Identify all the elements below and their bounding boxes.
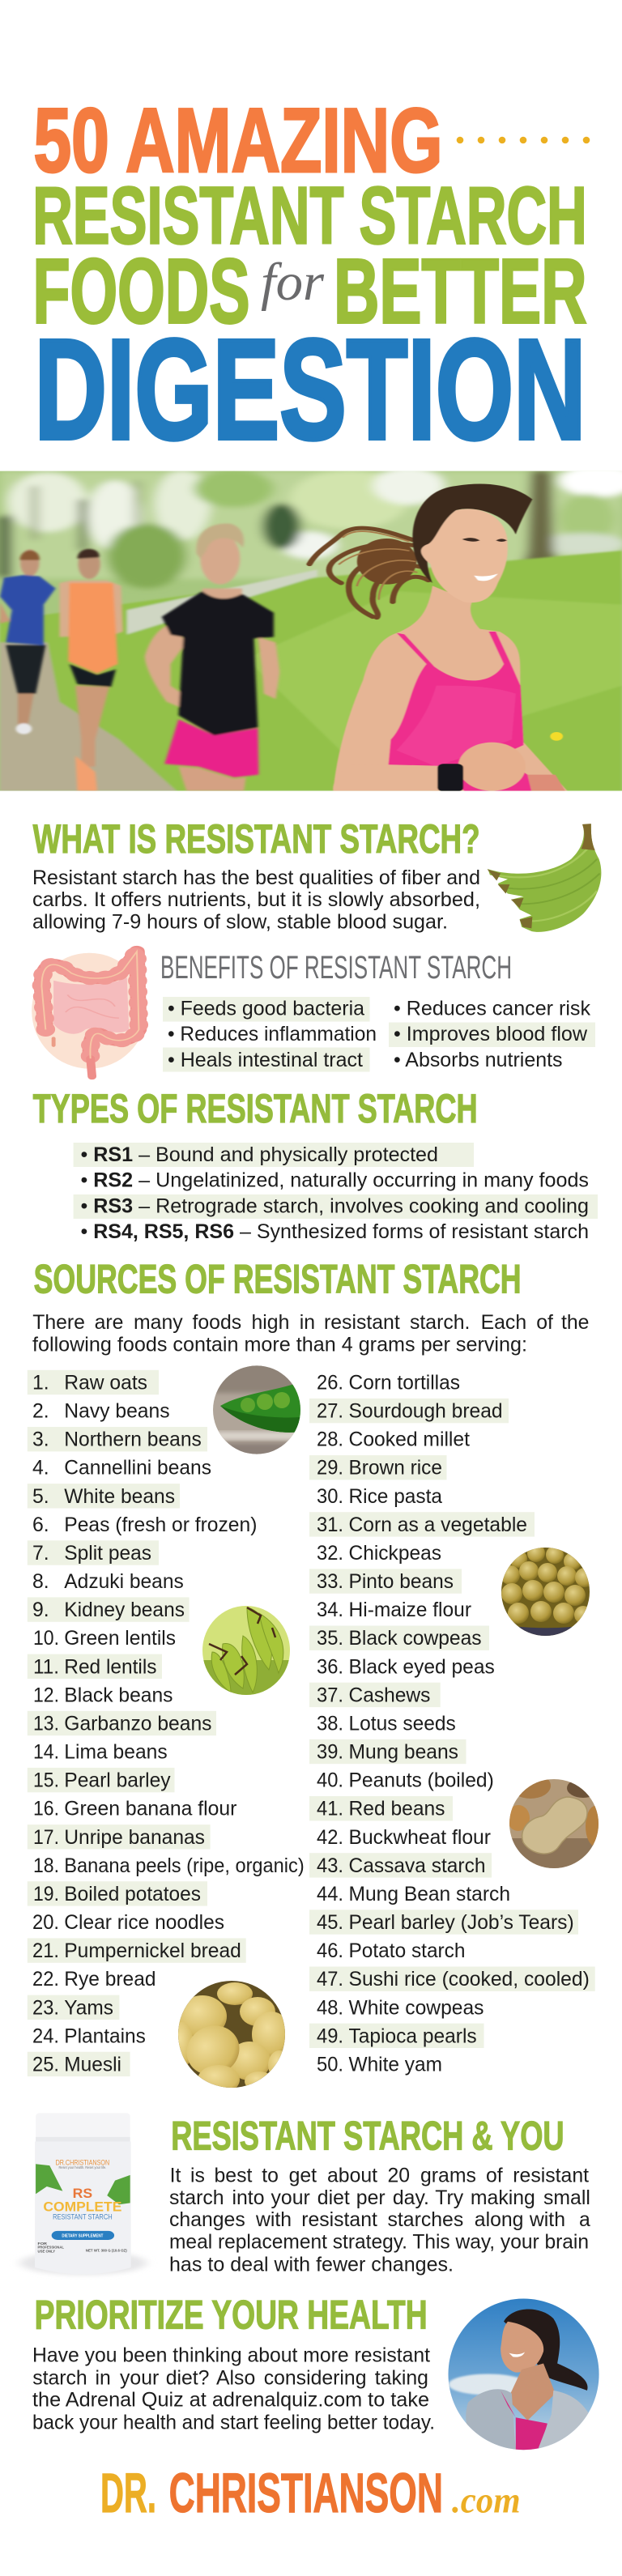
list column: foods 26 to 50: Rice pasta <box>348 1486 442 1508</box>
product: RS Complete bottle: COMPLETE <box>43 2199 121 2215</box>
runner in orange <box>59 549 123 791</box>
list column: foods 1 to 25: 13. <box>33 1714 59 1735</box>
runner in pink: foreground <box>309 483 567 791</box>
list column: foods 1 to 25: Lima beans <box>64 1741 168 1764</box>
list column: foods 1 to 25: 2. <box>32 1401 49 1423</box>
list column: foods 26 to 50: Corn as a vegetable <box>348 1514 527 1536</box>
list column: foods 26 to 50: Cooked millet <box>348 1429 470 1451</box>
product: RS Complete bottle: PROFESSIONAL <box>38 2246 64 2250</box>
text block: what is resistant starch: carbs. It offers nutrients, but it is slowly absorbed, <box>32 889 480 911</box>
list column: foods 26 to 50: Corn tortillas <box>348 1372 460 1394</box>
list column: foods 1 to 25: Boiled potatoes <box>64 1884 201 1905</box>
text block: resistant starch and you: into <box>232 2187 264 2209</box>
text block: sources intro: resistant <box>324 1312 400 1334</box>
text block: what is resistant starch: allowing 7-9 hours of slow, stable blood sugar. <box>32 911 448 933</box>
list column: foods 1 to 25: 25. <box>32 2054 59 2076</box>
text block: resistant starch and you: starch <box>169 2187 224 2209</box>
list column: foods 26 to 50: 49. <box>317 2025 343 2047</box>
runner in black <box>145 523 279 791</box>
list column: foods 26 to 50: Brown rice <box>348 1458 442 1480</box>
text block: prioritize your health: considering <box>264 2367 367 2389</box>
list column: foods 26 to 50: Pearl barley (Job’s Tears) <box>348 1912 574 1934</box>
list column: foods 1 to 25: 24. <box>32 2025 59 2047</box>
icon: intestines <box>32 952 147 1076</box>
title word: for: for <box>261 253 324 312</box>
text block: prioritize your health: back your health and start feeling better today. <box>32 2412 435 2433</box>
list column: foods 26 to 50: 39. <box>317 1741 343 1764</box>
text block: resistant starch and you: day. <box>393 2187 429 2209</box>
list column: foods 26 to 50: Mung Bean starch <box>348 1884 510 1905</box>
list column: foods 1 to 25: 23. <box>32 1997 59 2019</box>
list column: foods 26 to 50: 42. <box>317 1827 343 1849</box>
list column: foods 26 to 50: Pinto beans <box>348 1571 454 1593</box>
panel: benefits list: • Feeds good bacteria <box>168 998 364 1020</box>
text block: sources intro <box>32 1312 589 1356</box>
list column: foods 26 to 50: 43. <box>317 1855 343 1877</box>
text block: prioritize your health: in <box>96 2367 111 2389</box>
list column: foods 1 to 25: Yams <box>64 1997 113 2019</box>
list column: foods 26 to 50: 47. <box>317 1969 343 1991</box>
list column: foods 26 to 50: 48. <box>317 1997 343 2019</box>
text block: sources intro: Each <box>481 1312 526 1334</box>
list column: foods 26 to 50: Lotus seeds <box>348 1714 456 1735</box>
photo: pea pod <box>213 1365 300 1454</box>
list column: foods 26 to 50: Red beans <box>348 1799 445 1820</box>
list column: foods 26 to 50: 44. <box>317 1884 343 1905</box>
list column: foods 1 to 25: 5. <box>32 1486 49 1508</box>
text block: sources intro: foods <box>193 1312 241 1334</box>
list column: foods 26 to 50: Tapioca pearls <box>348 2025 477 2047</box>
photo: green bananas <box>202 1606 290 1695</box>
panel: types list: • RS1 – Bound and physically protected <box>81 1144 438 1166</box>
product: RS Complete bottle: DIETARY SUPPLEMENT <box>62 2234 104 2238</box>
text block: resistant starch and you: with <box>255 2209 292 2231</box>
text block: what is resistant starch <box>32 867 480 933</box>
list column: foods 1 to 25: 15. <box>33 1770 59 1792</box>
list column: foods 26 to 50: 26. <box>317 1372 343 1394</box>
text block: resistant starch and you: meal replacement strategy. This way, your brain <box>169 2232 589 2254</box>
list column: foods 1 to 25: Black beans <box>64 1684 173 1706</box>
text block: sources intro: are <box>95 1312 123 1334</box>
list column: foods 26 to 50: White cowpeas <box>348 1997 484 2019</box>
product: RS Complete bottle: NET WT. 300 G (10.6 OZ) <box>86 2249 127 2253</box>
list column: foods 26 to 50: 27. <box>317 1401 343 1423</box>
list column: foods 26 to 50: White yam <box>348 2054 442 2076</box>
list column: foods 1 to 25: 1. <box>32 1372 49 1394</box>
list column: foods 1 to 25: 16. <box>33 1799 59 1820</box>
text block: prioritize your health: Also <box>216 2367 255 2389</box>
text block: resistant starch and you: making <box>471 2187 535 2209</box>
text block: resistant starch and you: get <box>289 2165 317 2186</box>
text block: sources intro: many <box>134 1312 183 1334</box>
list column: foods 1 to 25: Raw oats <box>64 1372 147 1394</box>
text block: resistant starch and you: It <box>170 2165 181 2186</box>
list column: foods 1 to 25: Rye bread <box>64 1969 156 1991</box>
panel: types list: • RS3 – Retrograde starch, involves cooking and cooling <box>81 1195 589 1218</box>
list column: foods 26 to 50: Sourdough bread <box>348 1401 503 1423</box>
list column: foods 1 to 25: Peas (fresh or frozen) <box>64 1514 257 1536</box>
photo: peanuts <box>509 1779 599 1868</box>
photo: smiling woman in hoodie <box>446 2297 601 2450</box>
list column: foods 1 to 25: 10. <box>33 1628 59 1650</box>
list column: foods 1 to 25 <box>28 1370 305 2076</box>
panel: types list <box>74 1143 598 1243</box>
text block: sources intro: There <box>32 1312 85 1334</box>
list column: foods 26 to 50: Potato starch <box>348 1940 465 1962</box>
panel: benefits list: • Reduces cancer risk <box>394 998 591 1020</box>
list column: foods 26 to 50: Sushi rice (cooked, cooled) <box>348 1969 590 1991</box>
list column: foods 26 to 50: 50. <box>317 2054 343 2076</box>
text block: resistant starch and you: diet <box>317 2187 350 2209</box>
list column: foods 26 to 50: 31. <box>317 1514 343 1536</box>
list column: foods 1 to 25: Kidney beans <box>64 1599 185 1621</box>
panel: types list: • RS2 – Ungelatinized, naturally occurring in many foods <box>81 1170 589 1192</box>
list column: foods 26 to 50 <box>309 1372 595 2076</box>
text block: resistant starch and you: about <box>327 2165 377 2186</box>
panel: types list: • RS4, RS5, RS6 – Synthesized forms of resistant starch <box>81 1221 589 1243</box>
logo: Dr. Christianson: DR. <box>100 2462 156 2524</box>
title line: 50 Amazing: 50 AMAZING <box>34 90 442 191</box>
panel: benefits list: • Reduces inflammation <box>168 1024 377 1045</box>
heading: prioritize your health: PRIORITIZE YOUR HEALTH <box>35 2292 428 2337</box>
icon: green bananas <box>487 824 601 932</box>
list column: foods 1 to 25: Clear rice noodles <box>64 1912 224 1934</box>
text block: sources intro: high <box>251 1312 289 1334</box>
text block: resistant starch and you: resistant <box>513 2165 589 2186</box>
list column: foods 1 to 25: 3. <box>32 1429 49 1451</box>
list column: foods 1 to 25: Navy beans <box>64 1401 170 1423</box>
panel: benefits list: • Absorbs nutrients <box>394 1050 562 1071</box>
list column: foods 26 to 50: Peanuts (boiled) <box>348 1770 494 1792</box>
list column: foods 26 to 50: 29. <box>317 1458 343 1480</box>
list column: foods 26 to 50: Cashews <box>348 1684 430 1706</box>
list column: foods 1 to 25: 14. <box>33 1741 59 1764</box>
list column: foods 1 to 25: 9. <box>32 1599 49 1621</box>
list column: foods 1 to 25: 18. <box>33 1855 59 1877</box>
list column: foods 26 to 50: 30. <box>317 1486 343 1508</box>
list column: foods 1 to 25: Northern beans <box>64 1429 202 1451</box>
text block: resistant starch and you: your <box>271 2187 310 2209</box>
text block: resistant starch and you: grams <box>420 2165 476 2186</box>
list column: foods 26 to 50: 34. <box>317 1599 343 1621</box>
text block: prioritize your health: your <box>120 2367 159 2389</box>
list column: foods 26 to 50: 36. <box>317 1656 343 1678</box>
list column: foods 1 to 25: Pumpernickel bread <box>64 1940 241 1962</box>
list column: foods 1 to 25: 4. <box>32 1458 49 1480</box>
text block: resistant starch and you: per <box>356 2187 386 2209</box>
list column: foods 1 to 25: White beans <box>64 1486 175 1508</box>
text block: resistant starch and you: best <box>214 2165 252 2186</box>
panel: benefits list: • Heals intestinal tract <box>168 1050 363 1071</box>
text block: resistant starch and you: 20 <box>387 2165 410 2186</box>
list column: foods 26 to 50: 45. <box>317 1912 343 1934</box>
text block: resistant starch and you <box>169 2165 590 2276</box>
text block: prioritize your health: the Adrenal Quiz at adrenalquiz.com to take <box>32 2389 429 2412</box>
list column: foods 26 to 50: 40. <box>317 1770 343 1792</box>
list column: foods 26 to 50: Hi-maize flour <box>348 1599 471 1621</box>
list column: foods 1 to 25: 8. <box>32 1571 49 1593</box>
list column: foods 1 to 25: Cannellini beans <box>64 1458 211 1480</box>
list column: foods 1 to 25: Unripe bananas <box>64 1827 205 1849</box>
list column: foods 26 to 50: Black eyed peas <box>348 1656 495 1678</box>
text block: sources intro: following foods contain more than 4 grams per serving: <box>32 1335 527 1356</box>
panel: benefits list: • Improves blood flow <box>394 1024 587 1045</box>
text block: resistant starch and you: Try <box>435 2187 464 2209</box>
list column: foods 1 to 25: Red lentils <box>64 1656 157 1678</box>
list column: foods 26 to 50: 28. <box>317 1429 343 1451</box>
text block: resistant starch and you: starches <box>387 2209 463 2231</box>
list column: foods 26 to 50: 35. <box>317 1628 343 1650</box>
product: RS Complete bottle: DR.CHRISTIANSON <box>56 2159 109 2167</box>
product: RS Complete bottle: Reset your health. Reset your life. <box>58 2165 106 2169</box>
list column: foods 1 to 25: 22. <box>32 1969 59 1991</box>
list column: foods 1 to 25: 17. <box>33 1827 59 1849</box>
title word: Foods: FOODS <box>32 240 249 342</box>
text block: resistant starch and you: changes <box>169 2209 245 2231</box>
hero photo: women running <box>0 464 622 791</box>
list column: foods 1 to 25: 19. <box>33 1884 59 1905</box>
photo: potatoes <box>178 1981 285 2088</box>
list column: foods 1 to 25: Banana peels (ripe, organic) <box>64 1855 305 1877</box>
list column: foods 1 to 25: Garbanzo beans <box>64 1714 212 1735</box>
list column: foods 1 to 25: Plantains <box>64 2025 146 2047</box>
list column: foods 26 to 50: Cassava starch <box>348 1855 486 1877</box>
text block: prioritize your health: diet? <box>166 2367 209 2389</box>
text block: resistant starch and you: has to deal with fewer changes. <box>169 2255 454 2276</box>
list column: foods 26 to 50: 33. <box>317 1571 343 1593</box>
text block: sources intro: in <box>300 1312 315 1334</box>
product: RS Complete bottle: RESISTANT STARCH <box>53 2214 113 2221</box>
text block: resistant starch and you: resistant <box>301 2209 377 2231</box>
list column: foods 1 to 25: 7. <box>32 1543 49 1565</box>
text block: prioritize your health <box>32 2345 435 2433</box>
list column: foods 1 to 25: Split peas <box>64 1543 151 1565</box>
text block: prioritize your health: Have you been thinking about more resistant <box>32 2345 430 2367</box>
list column: foods 1 to 25: Green lentils <box>64 1628 176 1650</box>
product: RS Complete bottle <box>19 2113 147 2275</box>
title <box>32 90 590 470</box>
list column: foods 1 to 25: Adzuki beans <box>64 1571 184 1593</box>
list column: foods 26 to 50: 46. <box>317 1940 343 1962</box>
dotted leader <box>457 137 590 143</box>
list column: foods 1 to 25: 12. <box>33 1684 59 1706</box>
list column: foods 1 to 25: Muesli <box>64 2054 121 2076</box>
list column: foods 26 to 50: 37. <box>317 1684 343 1706</box>
text block: prioritize your health: starch <box>32 2367 87 2389</box>
text block: resistant starch and you: along <box>475 2209 523 2231</box>
product: RS Complete bottle: RS <box>73 2186 92 2201</box>
list column: foods 1 to 25: 21. <box>32 1940 59 1962</box>
product: RS Complete bottle: USE ONLY <box>38 2250 56 2254</box>
list column: foods 1 to 25: Pearl barley <box>64 1770 171 1792</box>
text block: sources intro: of <box>536 1312 553 1334</box>
list column: foods 26 to 50: Buckwheat flour <box>348 1827 491 1849</box>
list column: foods 26 to 50: Mung beans <box>348 1741 458 1764</box>
text block: resistant starch and you: small <box>543 2187 590 2209</box>
text block: what is resistant starch: Resistant starch has the best qualities of fiber and <box>32 867 480 889</box>
text block: prioritize your health: taking <box>375 2367 428 2389</box>
list column: foods 26 to 50: 32. <box>317 1543 343 1565</box>
photo: chickpeas <box>501 1548 590 1636</box>
text block: resistant starch and you: with <box>529 2209 565 2231</box>
text block: resistant starch and you: of <box>486 2165 503 2186</box>
text block: resistant starch and you: is <box>190 2165 205 2186</box>
logo: Dr. Christianson: CHRISTIANSON <box>169 2462 443 2524</box>
list column: foods 1 to 25: 11. <box>33 1656 59 1678</box>
list column: foods 26 to 50: Black cowpeas <box>348 1628 482 1650</box>
runner in blue <box>0 549 56 734</box>
list column: foods 26 to 50: 38. <box>317 1714 343 1735</box>
text block: sources intro: the <box>561 1312 589 1334</box>
list column: foods 1 to 25: Green banana flour <box>64 1799 236 1820</box>
logo: Dr. Christianson: .com <box>452 2480 521 2521</box>
text block: sources intro: starch. <box>410 1312 470 1334</box>
list column: foods 1 to 25: 6. <box>32 1514 49 1536</box>
text block: resistant starch and you: a <box>579 2209 590 2231</box>
list column: foods 26 to 50: Chickpeas <box>348 1543 441 1565</box>
list column: foods 1 to 25: 20. <box>32 1912 59 1934</box>
panel: benefits list <box>163 997 595 1072</box>
list column: foods 26 to 50: 41. <box>317 1799 343 1820</box>
product: RS Complete bottle: FOR <box>38 2242 48 2246</box>
text block: resistant starch and you: to <box>262 2165 279 2186</box>
